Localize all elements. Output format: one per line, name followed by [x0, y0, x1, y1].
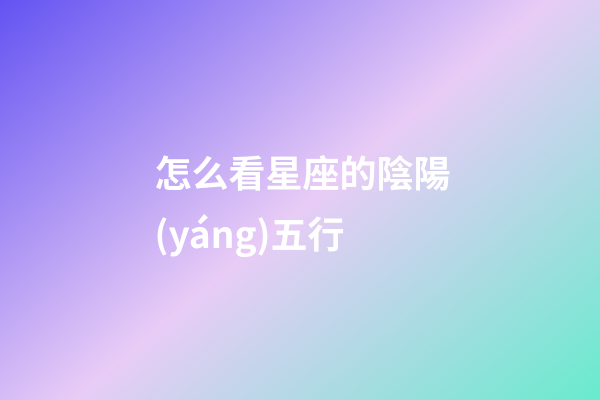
title: (yáng)五行 — [154, 205, 345, 259]
title — [154, 144, 450, 259]
title: 怎么看星座的陰陽 — [154, 144, 450, 198]
